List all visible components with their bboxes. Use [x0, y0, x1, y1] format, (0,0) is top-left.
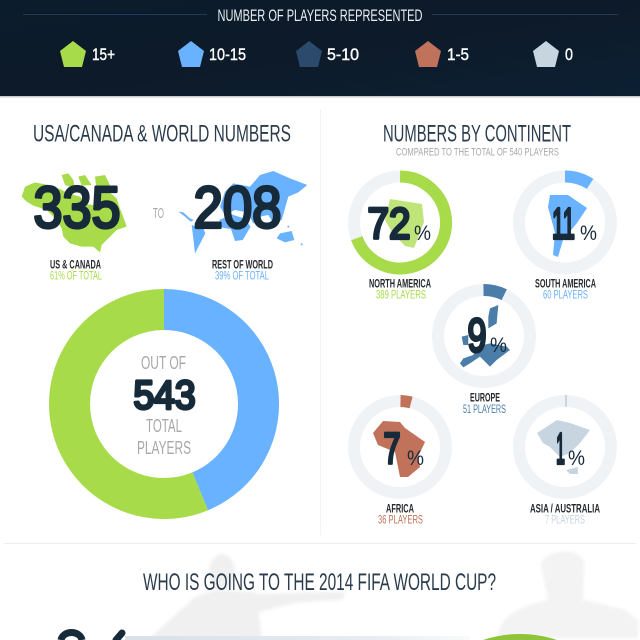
label: US and Canada — [50, 260, 102, 282]
legend header panel — [0, 0, 640, 98]
legend item: 1-5: 1-5 — [447, 45, 469, 64]
label: Africa: 36 PLAYERS — [378, 514, 423, 526]
label: North America: NORTH AMERICA — [369, 278, 431, 290]
label: Asia and Australia: 7 PLAYERS — [545, 514, 585, 526]
legend item: 10-15: 10-15 — [209, 45, 246, 64]
label: Africa: AFRICA — [386, 504, 414, 516]
ring: South America: 11 — [552, 200, 575, 248]
connector word: to: TO — [153, 205, 164, 222]
background photo: left player silhouette — [150, 554, 346, 638]
sliver of a large statistic cropped by the frame edge — [61, 632, 122, 640]
label: Africa — [378, 504, 423, 526]
label: rest of world: 39% OF TOTAL — [215, 270, 269, 282]
ring: North America — [354, 176, 446, 268]
label: rest of world: REST OF WORLD — [212, 260, 273, 272]
number: 208: 208 — [194, 176, 282, 240]
panel: USA/Canada and world numbers — [22, 120, 307, 499]
number: 335: 335 — [34, 176, 120, 240]
ring: Asia and Australia: 1 — [556, 424, 565, 474]
ring: Africa: % — [407, 447, 424, 470]
legend item: 5-10 — [296, 41, 359, 67]
subheading: COMPARED TO THE TOTAL OF 540 PLAYERS — [396, 146, 559, 158]
legend item: 0 — [533, 41, 573, 67]
ring: Africa: 7 — [384, 424, 400, 474]
legend item: 0: 0 — [565, 45, 573, 64]
label: US and Canada: 61% OF TOTAL — [50, 270, 102, 282]
label: South America — [535, 278, 596, 302]
legend item: 15+: 15+ — [92, 45, 115, 64]
label: Europe — [463, 392, 506, 416]
label: North America — [369, 278, 431, 302]
label: rest of world — [212, 260, 273, 282]
donut chart: total players: PLAYERS — [137, 438, 191, 458]
ring: Asia and Australia — [519, 401, 611, 493]
legend item: 10-15 — [178, 41, 246, 67]
ring: South America: % — [580, 222, 597, 245]
bar: qualifying teams — [125, 636, 470, 640]
green circle — [483, 634, 557, 640]
ring: South America — [519, 176, 611, 268]
donut chart: total players: 543 — [134, 374, 196, 418]
label: Europe: EUROPE — [470, 392, 500, 404]
label: US and Canada: US & CANADA — [50, 260, 101, 272]
label: North America: 389 PLAYERS — [376, 290, 426, 302]
donut chart: total players: OUT OF — [141, 353, 186, 373]
legend item: 5-10: 5-10 — [327, 45, 359, 64]
label: Europe: 51 PLAYERS — [463, 404, 506, 416]
ring: Europe: % — [490, 334, 507, 357]
label: Asia and Australia — [530, 504, 600, 526]
label: Asia and Australia: ASIA / AUSTRALIA — [530, 504, 600, 516]
label: South America: 60 PLAYERS — [543, 290, 588, 302]
label: South America: SOUTH AMERICA — [535, 278, 596, 290]
donut chart: total players — [70, 310, 259, 499]
donut chart: total players: TOTAL — [146, 416, 182, 436]
background photo: right player silhouette — [497, 552, 638, 638]
legend item: 15+ — [60, 41, 115, 67]
ring: Africa — [354, 401, 446, 493]
ring: North America: 72 — [368, 200, 410, 248]
map: rest of world — [178, 171, 307, 253]
map: US and Canada — [22, 173, 127, 252]
legend item: 1-5 — [415, 41, 469, 67]
panel: numbers by continent — [354, 120, 611, 526]
ring: Europe — [438, 290, 530, 382]
ring: Europe: 9 — [468, 308, 486, 362]
legend title: NUMBER OF PLAYERS REPRESENTED — [218, 7, 423, 25]
ring: Asia and Australia: % — [568, 447, 585, 470]
ring: North America: % — [414, 222, 431, 245]
heading: USA/Canada and world numbers: USA/CANADA & WORLD NUMBERS — [33, 120, 291, 148]
